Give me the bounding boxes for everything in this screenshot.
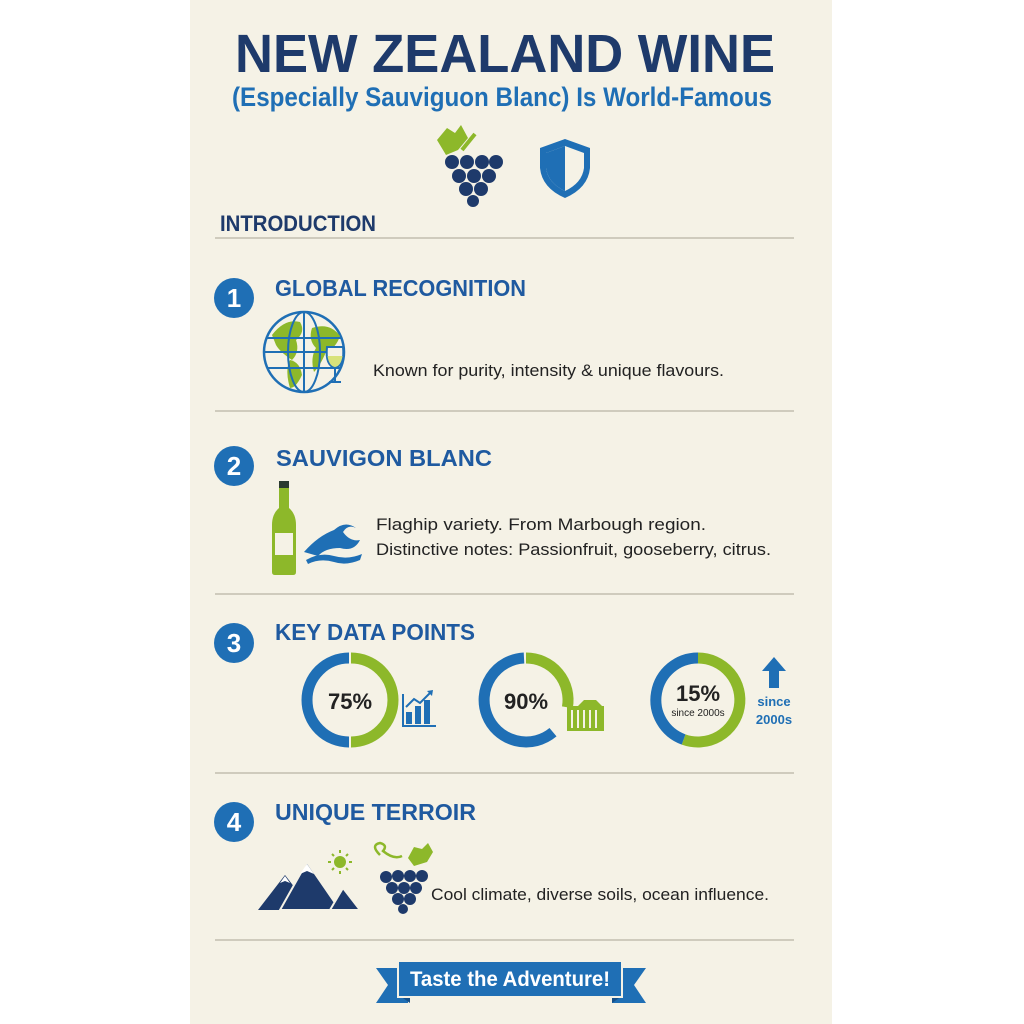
donut: 15%: 15%: [676, 681, 720, 706]
number badge 2: [214, 446, 254, 486]
icon: wave: [304, 524, 362, 564]
subtitle: (Especially Sauviguon Blanc) Is World-Famous: [232, 82, 772, 112]
number badge 2: 2: [227, 451, 241, 481]
section 3: key data points: [214, 619, 792, 742]
icon: mountains and sun: [258, 850, 360, 910]
number badge 4: [214, 802, 254, 842]
icon: shipping container: [567, 700, 604, 731]
donut: 15%: [656, 658, 740, 742]
text 1: Known for purity, intensity & unique flavours.: [373, 361, 724, 380]
text 4: Cool climate, diverse soils, ocean influence.: [431, 885, 769, 904]
number badge 4: 4: [227, 807, 242, 837]
donut: 90%: [484, 658, 568, 742]
heading 1: GLOBAL RECOGNITION: [275, 275, 526, 301]
donut: 75%: [307, 658, 393, 742]
icon: up arrow with label: [756, 657, 792, 727]
heading 3: KEY DATA POINTS: [275, 619, 475, 645]
icon: globe with wine glass: [264, 312, 344, 392]
banner: taste the adventure: Taste the Adventure!: [410, 968, 610, 991]
number badge 3: 3: [227, 628, 241, 658]
heading 2: SAUVIGON BLANC: [276, 445, 492, 471]
section 2: sauvignon blanc: [214, 445, 771, 575]
donut: 90%: 90%: [504, 689, 548, 714]
section 4: unique terroir: [214, 799, 769, 914]
section 1: global recognition: [214, 275, 724, 392]
panel: background: [190, 0, 832, 1024]
icon: wine bottle: [272, 481, 296, 575]
donut: 15%: since 2000s: [671, 708, 725, 719]
text 2: Distinctive notes: Passionfruit, gooseberry, citrus.: [376, 540, 771, 559]
number badge 1: [214, 278, 254, 318]
number badge 3: [214, 623, 254, 663]
text 2: Flaghip variety. From Marbough region.: [376, 515, 706, 534]
icon: up arrow with label: 2000s: [756, 712, 792, 727]
icon: grapes with vine: [375, 843, 433, 914]
icon: shield: [540, 139, 590, 198]
heading 4: UNIQUE TERROIR: [275, 799, 476, 825]
donut: 75%: 75%: [328, 689, 372, 714]
number badge 1: 1: [227, 283, 241, 313]
title: NEW ZEALAND WINE: [235, 24, 775, 84]
icon: bar chart: [403, 690, 436, 726]
heading: introduction: INTRODUCTION: [220, 211, 376, 236]
text 2: [376, 515, 771, 559]
banner: taste the adventure: [376, 961, 646, 1003]
icon: grapes header: [437, 125, 503, 207]
icon: up arrow with label: since: [757, 694, 791, 709]
